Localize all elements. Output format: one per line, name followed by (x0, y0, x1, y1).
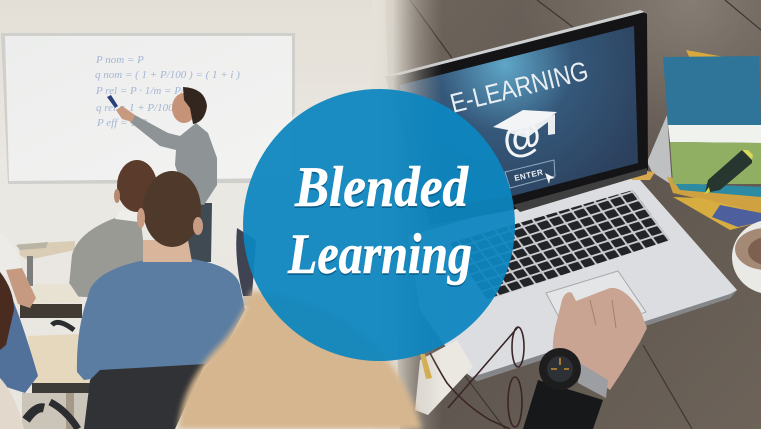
coffee cup (732, 220, 761, 294)
student in blue shirt (77, 171, 245, 380)
title: Blended (294, 156, 469, 219)
e-learning screen text: E-LEARNING (447, 56, 591, 119)
wrist watch (539, 348, 608, 398)
chair (26, 364, 205, 429)
trackpad (546, 271, 646, 338)
laptop base (408, 170, 737, 381)
handwritten formulas: P rel = P · 1/m = P/m (95, 85, 192, 97)
handwritten formulas: q rel = 1 + P/100 · 1/m (96, 102, 198, 114)
highlighter marker (704, 150, 753, 194)
enter button: ENTER (513, 168, 544, 183)
handwritten formulas (95, 54, 240, 129)
title: Learning (287, 225, 472, 288)
hand (553, 288, 647, 390)
handwritten formulas: q nom = ( 1 + P/100 ) = ( 1 + i ) (95, 69, 240, 81)
desks (20, 284, 253, 429)
notebook and pen (415, 340, 473, 415)
laptop screen (385, 10, 648, 225)
books and folders (647, 50, 761, 230)
blend between the two photos (372, 0, 442, 429)
student left edge (0, 232, 38, 429)
title: Blended (294, 158, 469, 221)
eyeglasses (430, 327, 524, 429)
student right side (236, 228, 256, 296)
wooden desk (385, 0, 761, 429)
handwritten formulas: P eff = 100 (96, 117, 147, 129)
title (287, 156, 472, 288)
sleeve (523, 380, 603, 429)
student back row (68, 160, 157, 300)
panel: classroom photo (0, 0, 440, 429)
handwritten formulas: P nom = P (95, 54, 144, 66)
panel: laptop on wooden desk photo (385, 0, 761, 429)
table at back left (16, 241, 75, 286)
icon: graduation cap with at sign: @ (498, 112, 546, 164)
teacher (107, 87, 217, 262)
title: Learning (287, 223, 472, 286)
enter button (505, 160, 555, 188)
whiteboard (1, 33, 295, 184)
circle badge (243, 89, 515, 361)
foreground blonde hair (178, 290, 422, 429)
keyboard (450, 190, 670, 300)
